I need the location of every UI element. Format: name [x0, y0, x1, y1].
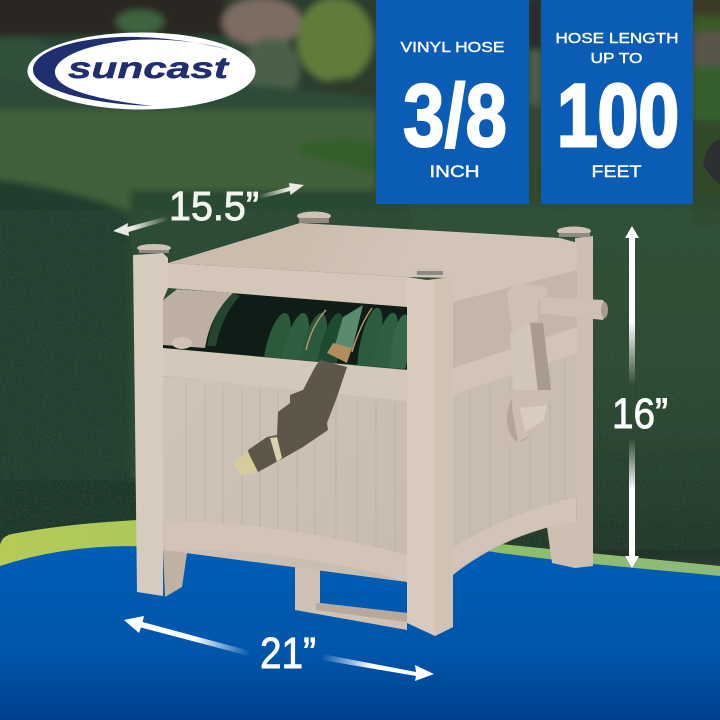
- carry handle step: [316, 603, 407, 622]
- dimension: 15.5 inch depth: 15.5”: [169, 183, 259, 229]
- lid: [168, 223, 578, 307]
- lawn rock: [703, 138, 720, 186]
- panel: hose length up to 100 feet: HOSE LENGTH: [556, 31, 678, 47]
- dimension: 21 inch width: [124, 616, 434, 681]
- dimension: 21 inch width: 21”: [260, 629, 316, 678]
- front panel boards: [163, 376, 407, 582]
- reel hose coils: [163, 289, 407, 369]
- panel: hose length up to 100 feet: FEET: [592, 162, 642, 181]
- hose opening: [163, 289, 407, 369]
- panel: vinyl hose 3/8 inch: VINYL HOSE: [400, 40, 505, 56]
- panel: vinyl hose 3/8 inch: 3/8: [403, 65, 507, 165]
- right side panel: [453, 243, 577, 575]
- front corner post: [407, 277, 453, 636]
- front top rail: [163, 348, 407, 401]
- spray nozzle: [233, 343, 352, 475]
- logo: suncast: suncast: [68, 52, 231, 85]
- crank handle: [492, 283, 608, 447]
- panel slats: [186, 382, 395, 552]
- panel: hose length up to 100 feet: UP TO: [590, 51, 642, 67]
- dimension: 16 inch height: [612, 226, 668, 568]
- panel: vinyl hose 3/8 inch: INCH: [430, 162, 480, 181]
- panel: hose length up to 100 feet: [541, 0, 693, 204]
- left post: [133, 253, 187, 597]
- dimension: 15.5 inch depth: [113, 183, 304, 236]
- front bottom arch rail: [165, 522, 407, 582]
- logo: suncast: [28, 32, 256, 110]
- post caps: [137, 212, 591, 275]
- back leg and carry handle: [295, 555, 407, 630]
- dimension: 16 inch height: 16”: [612, 390, 668, 438]
- right rear post: [547, 236, 593, 568]
- hose reel product: [133, 212, 608, 636]
- lawn texture: [0, 210, 720, 550]
- panel: vinyl hose 3/8 inch: [376, 0, 529, 204]
- right side panel slats: [470, 358, 565, 538]
- panel: hose length up to 100 feet: 100: [557, 65, 679, 165]
- blue curved floor: [0, 538, 720, 720]
- green curved band: [0, 520, 720, 580]
